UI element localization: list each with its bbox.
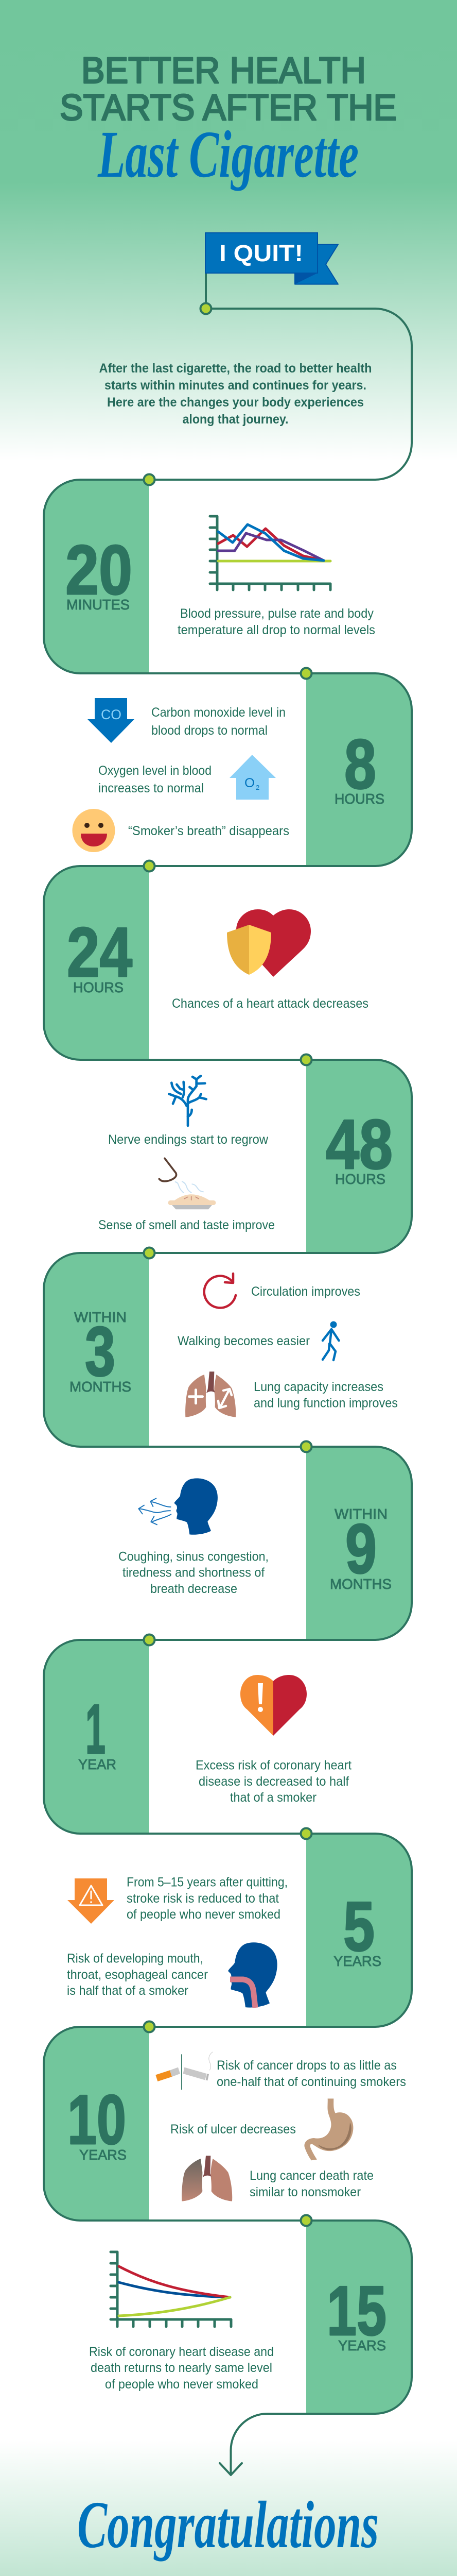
time label: 15 years: 15 bbox=[327, 2272, 386, 2350]
icon: lungs with plus and arrow bbox=[185, 1371, 236, 1417]
panel: 10 years bbox=[44, 2027, 406, 2221]
icon: heart with shield bbox=[227, 909, 311, 977]
text: cancer risk bbox=[217, 2058, 406, 2089]
text: coronary risk: disease is decreased to half bbox=[199, 1774, 349, 1789]
flag: I quit: I QUIT! bbox=[219, 240, 303, 266]
icon: O2 up arrow: O bbox=[244, 776, 255, 790]
time label: within 9 months: 9 bbox=[345, 1510, 377, 1588]
arrow: end of journey bbox=[220, 2463, 242, 2475]
icon: broken cigarette bbox=[155, 2052, 213, 2090]
time label: 20 minutes: 20 bbox=[65, 531, 132, 609]
text: stroke risk bbox=[127, 1875, 288, 1922]
text: mouth and throat cancer bbox=[67, 1952, 208, 1998]
icon: circulation arrow bbox=[204, 1274, 236, 1308]
text: stroke risk: From 5–15 years after quitting, bbox=[127, 1875, 288, 1890]
text: coronary heart disease bbox=[89, 2345, 274, 2392]
icon: stomach bbox=[304, 2098, 353, 2160]
text: lung cancer bbox=[250, 2168, 374, 2199]
text: mouth and throat cancer: Risk of developing mouth, bbox=[67, 1952, 203, 1966]
text: vitals: temperature all drop to normal levels bbox=[178, 623, 375, 637]
text: coronary risk bbox=[196, 1758, 351, 1805]
time label: 1 year: 1 bbox=[85, 1690, 106, 1768]
icon: nerve endings bbox=[169, 1076, 206, 1126]
time label: 15 years: YEARS bbox=[338, 2337, 386, 2353]
intro text: along that journey. bbox=[182, 412, 288, 427]
time label: 20 minutes: MINUTES bbox=[66, 597, 130, 613]
text: lung capacity bbox=[254, 1380, 398, 1411]
icon: CO down arrow bbox=[87, 698, 134, 743]
intro text bbox=[99, 361, 372, 427]
text: vitals bbox=[178, 606, 375, 637]
title: BETTER HEALTH bbox=[81, 50, 366, 91]
text: walking: Walking becomes easier bbox=[178, 1334, 310, 1348]
panel: within 3 months bbox=[44, 1253, 398, 1447]
time label: 48 hours: HOURS bbox=[335, 1171, 385, 1187]
time label: within 9 months bbox=[330, 1506, 392, 1592]
icon: head breathing out bbox=[138, 1478, 218, 1535]
text: ulcer: Risk of ulcer decreases bbox=[170, 2122, 296, 2137]
flag: I quit bbox=[205, 233, 338, 309]
text: mouth and throat cancer: is half that of a smoker bbox=[67, 1984, 188, 1998]
icon: CO down arrow: CO bbox=[101, 707, 121, 722]
icon: half heart warning bbox=[240, 1675, 307, 1736]
text: lung cancer: Lung cancer death rate bbox=[250, 2168, 374, 2183]
text: coughing: breath decrease bbox=[150, 1582, 237, 1596]
panel: 48 hours bbox=[98, 1060, 412, 1253]
text: smell and taste: Sense of smell and taste improve bbox=[98, 1218, 275, 1232]
panel: 20 minutes bbox=[44, 480, 375, 673]
text: carbon monoxide: blood drops to normal bbox=[151, 723, 268, 738]
icon: stroke warning arrow bbox=[67, 1878, 114, 1924]
time label: 24 hours: HOURS bbox=[73, 979, 124, 995]
text: stroke risk: of people who never smoked bbox=[127, 1907, 280, 1922]
journey path line bbox=[44, 309, 412, 2475]
text: nerve endings: Nerve endings start to regrow bbox=[108, 1132, 269, 1147]
icon: darkened lungs bbox=[182, 2156, 232, 2201]
time label: within 9 months: MONTHS bbox=[330, 1576, 392, 1592]
icon: O2 up arrow bbox=[230, 755, 276, 800]
text: cancer risk: one-half that of continuing smokers bbox=[217, 2075, 406, 2089]
title bbox=[60, 50, 397, 192]
text: coughing: tiredness and shortness of bbox=[122, 1566, 265, 1580]
time label: 48 hours: 48 bbox=[326, 1105, 393, 1183]
text: lung cancer: similar to nonsmoker bbox=[250, 2185, 361, 2199]
intro text: Here are the changes your body experiences bbox=[107, 395, 364, 410]
icon: walking person bbox=[323, 1321, 339, 1360]
icon: smiling face bbox=[72, 809, 115, 852]
text: oxygen: increases to normal bbox=[98, 781, 204, 795]
text: lung capacity: Lung capacity increases bbox=[254, 1380, 383, 1394]
time label: within 3 months: MONTHS bbox=[69, 1379, 131, 1395]
text: coughing: Coughing, sinus congestion, bbox=[118, 1550, 269, 1564]
panel: 24 hours bbox=[44, 866, 368, 1060]
time label: 10 years: 10 bbox=[67, 2080, 126, 2159]
icon: head with throat bbox=[228, 1942, 277, 2008]
panel: 5 years bbox=[67, 1834, 412, 2027]
intro text: starts within minutes and continues for years. bbox=[104, 378, 366, 393]
text: oxygen bbox=[98, 764, 212, 795]
text: circulation: Circulation improves bbox=[251, 1284, 360, 1299]
text: carbon monoxide bbox=[151, 705, 286, 738]
time label: 8 hours: 8 bbox=[344, 725, 376, 803]
text: cancer risk: Risk of cancer drops to as little as bbox=[217, 2058, 397, 2073]
title: STARTS AFTER THE bbox=[60, 88, 397, 128]
time label: 8 hours: HOURS bbox=[335, 791, 384, 807]
icon: O2 up arrow: 2 bbox=[256, 784, 259, 791]
time label: 5 years: 5 bbox=[343, 1887, 375, 1965]
icon: nose smelling pie bbox=[159, 1158, 216, 1209]
text: coughing bbox=[118, 1550, 269, 1596]
text: carbon monoxide: Carbon monoxide level in bbox=[151, 705, 286, 720]
line chart: risk converging bbox=[111, 2252, 231, 2327]
text: coronary heart disease: death returns to nearly same level bbox=[91, 2361, 272, 2375]
panel: 8 hours bbox=[72, 673, 412, 866]
text: vitals: Blood pressure, pulse rate and body bbox=[180, 606, 374, 621]
time label: within 9 months: WITHIN bbox=[335, 1506, 388, 1522]
time label: 10 years: YEARS bbox=[79, 2147, 127, 2163]
panel: 1 year bbox=[44, 1640, 351, 1834]
text: mouth and throat cancer: throat, esophageal cancer bbox=[67, 1968, 208, 1982]
time label: 24 hours: 24 bbox=[67, 913, 132, 991]
panel: within 9 months bbox=[118, 1447, 412, 1640]
time label: 1 year: YEAR bbox=[78, 1756, 116, 1772]
text: oxygen: Oxygen level in blood bbox=[98, 764, 212, 778]
text: smoker's breath: “Smoker’s breath” disappears bbox=[128, 824, 289, 838]
time label: within 3 months: 3 bbox=[85, 1312, 115, 1391]
panel: 15 years bbox=[89, 2221, 412, 2414]
text: coronary heart disease: Risk of coronary heart disease and bbox=[89, 2345, 274, 2359]
text: coronary heart disease: of people who never smoked bbox=[105, 2377, 258, 2392]
line chart: vitals dropping to normal bbox=[210, 516, 330, 590]
milestone dots bbox=[144, 303, 312, 2226]
time label: 1 year bbox=[78, 1690, 116, 1772]
intro text: After the last cigarette, the road to better health bbox=[99, 361, 372, 376]
time label: 5 years: YEARS bbox=[333, 1953, 381, 1969]
text: stroke risk: stroke risk is reduced to that bbox=[127, 1891, 279, 1906]
time label: within 3 months bbox=[69, 1309, 131, 1395]
text: heart attack: Chances of a heart attack decreases bbox=[172, 996, 368, 1011]
time label: within 3 months: WITHIN bbox=[74, 1309, 127, 1325]
text: coronary risk: that of a smoker bbox=[230, 1790, 317, 1805]
text: coronary risk: Excess risk of coronary heart bbox=[196, 1758, 351, 1773]
text: lung capacity: and lung function improves bbox=[254, 1396, 398, 1411]
